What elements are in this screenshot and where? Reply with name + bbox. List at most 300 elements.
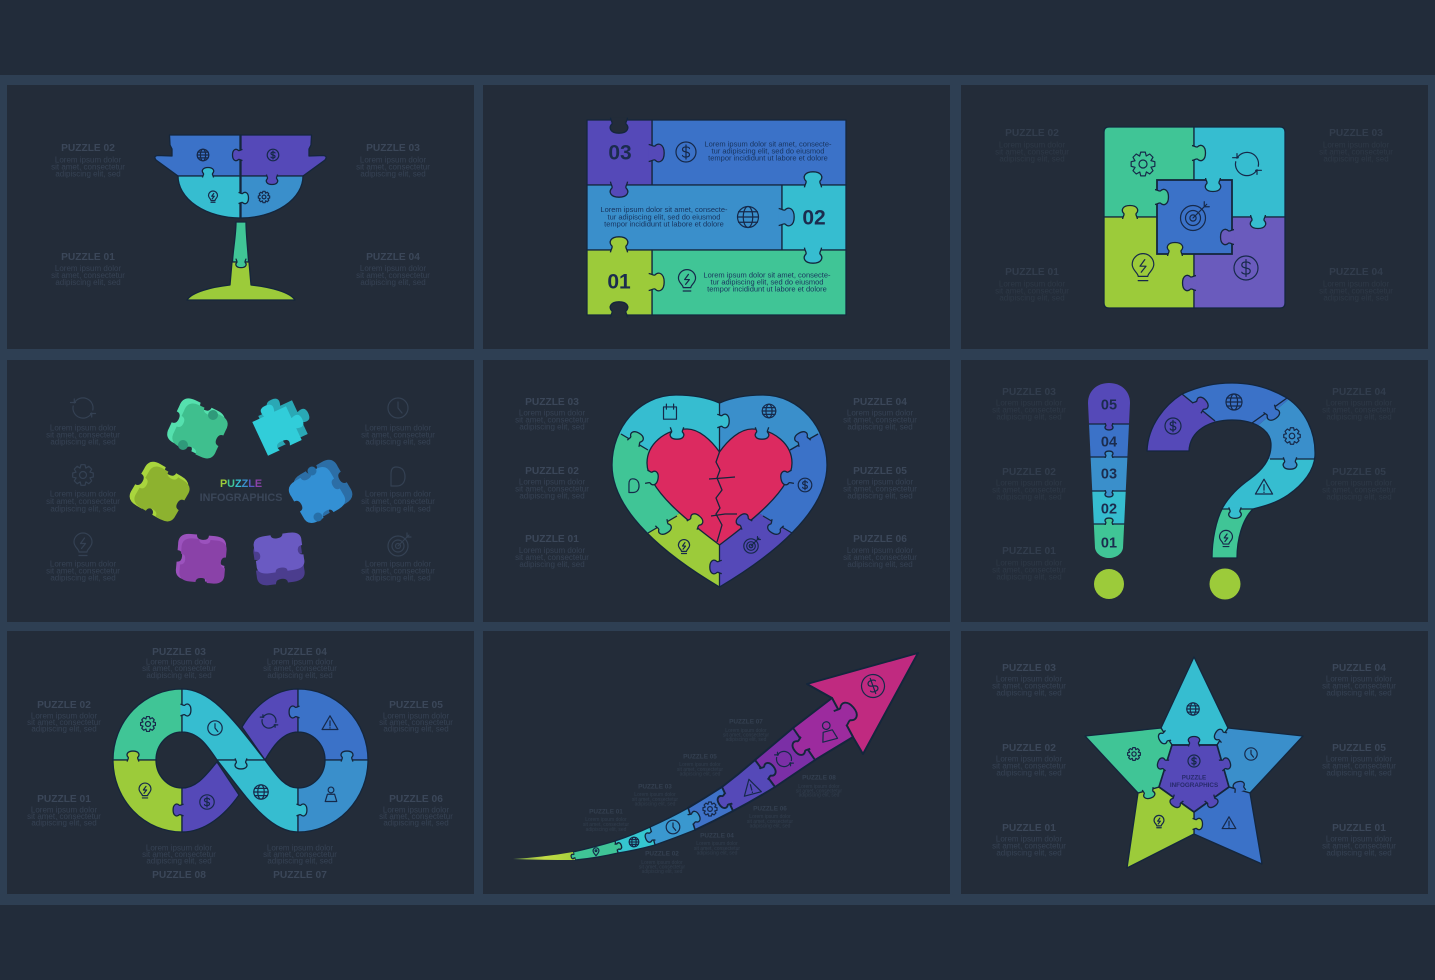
text row 1 — [704, 140, 832, 162]
piece: stem — [232, 222, 248, 262]
label: left middle: Lorem ipsum dolor — [50, 490, 116, 498]
label: puzzle 01: sit amet, consectetur — [995, 286, 1069, 296]
label: puzzle 02: sit amet, consectetur — [51, 162, 125, 172]
label: puzzle 06: adipiscing elit, sed — [750, 824, 791, 830]
label: puzzle 03: adipiscing elit, sed — [635, 802, 676, 808]
icon: gear — [703, 802, 717, 816]
icon: dollar — [1234, 256, 1258, 280]
label: puzzle 01: Lorem ipsum dolor — [996, 558, 1062, 568]
center title: PUZZLE — [220, 478, 262, 490]
piece: blue right top — [298, 689, 368, 760]
question mark — [1146, 382, 1316, 600]
label: puzzle 04: sit amet, consectetur — [843, 416, 917, 424]
label: puzzle 04: Lorem ipsum dolor — [267, 658, 333, 666]
center title — [1170, 774, 1218, 789]
arrow segment 6 — [722, 760, 775, 811]
label: puzzle 02: adipiscing elit, sed — [642, 869, 683, 875]
center title: INFOGRAPHICS — [200, 492, 282, 504]
label: puzzle 03: PUZZLE 03 — [1329, 128, 1383, 139]
label: right bottom: sit amet, consectetur — [361, 566, 435, 576]
label: puzzle 03: adipiscing elit, sed — [146, 671, 212, 680]
label: puzzle 01: PUZZLE 01 — [61, 252, 115, 263]
label: puzzle 02: Lorem ipsum dolor — [996, 478, 1062, 488]
label: puzzle 03: PUZZLE 03 — [525, 397, 579, 408]
label: puzzle 01 — [27, 794, 101, 828]
panel: arrow puzzle — [483, 631, 950, 894]
text row 3: tempor incididunt ut labore et dolore — [707, 284, 827, 294]
label: left top: Lorem ipsum dolor — [50, 424, 116, 432]
label: puzzle 01: adipiscing elit, sed — [999, 294, 1065, 302]
label: right top: adipiscing elit, sed — [365, 438, 431, 446]
icon: dollar — [267, 149, 279, 161]
piece: bottom left — [1104, 217, 1194, 308]
label: puzzle 03 — [992, 387, 1066, 422]
label: puzzle 03: sit amet, consectetur — [992, 682, 1066, 690]
label: left middle — [46, 490, 120, 514]
label: puzzle 02: adipiscing elit, sed — [55, 170, 121, 178]
label: puzzle 04: sit amet, consectetur — [1322, 682, 1396, 690]
label: puzzle 02 — [995, 128, 1069, 164]
label: puzzle 02 — [51, 143, 125, 178]
label: puzzle 06: PUZZLE 06 — [753, 806, 787, 812]
exclamation segments — [1088, 383, 1130, 558]
arrow labels — [583, 718, 842, 875]
label: puzzle 01: PUZZLE 01 — [589, 808, 623, 816]
question dot — [1210, 568, 1240, 600]
label: puzzle 03: Lorem ipsum dolor — [146, 658, 212, 666]
goblet tabs — [202, 149, 278, 268]
label: puzzle 08: adipiscing elit, sed — [146, 856, 212, 866]
row tabs — [610, 118, 822, 317]
label: puzzle 01: PUZZLE 01 — [1005, 267, 1059, 278]
icon: globe — [1226, 394, 1242, 410]
label: puzzle 01: adipiscing elit, sed — [996, 848, 1062, 858]
label: right bottom — [361, 560, 435, 582]
text row 2: tempor incididunt ut labore et dolore — [604, 220, 724, 228]
number 02: 02 — [1101, 502, 1117, 518]
icon: calendar — [664, 404, 676, 419]
icon: dollar — [200, 795, 214, 809]
label: puzzle 02: PUZZLE 02 — [525, 466, 579, 477]
label: puzzle 02: sit amet, consectetur — [995, 148, 1069, 156]
label: puzzle 04 — [1319, 267, 1393, 302]
label: puzzle 05: sit amet, consectetur — [1322, 762, 1396, 770]
label: puzzle 08 — [796, 774, 842, 798]
arrow head — [807, 653, 918, 754]
piece: green left top — [113, 689, 182, 760]
infinity chart — [113, 689, 368, 832]
label: puzzle 07: PUZZLE 07 — [273, 870, 327, 881]
label: puzzle 02 — [515, 466, 589, 500]
label: puzzle 06: Lorem ipsum dolor — [383, 806, 449, 814]
piece: right point — [1217, 728, 1303, 793]
label: puzzle 06: PUZZLE 06 — [853, 534, 907, 545]
label: puzzle 01 right: Lorem ipsum dolor — [1326, 834, 1392, 844]
icon: clock — [208, 721, 222, 735]
label: puzzle 03: sit amet, consectetur — [356, 162, 430, 172]
icon: pin — [593, 848, 599, 856]
icon: target — [744, 537, 760, 553]
label: puzzle 06: PUZZLE 06 — [389, 794, 443, 805]
heart crack — [709, 452, 737, 542]
icon: dollar — [798, 478, 812, 492]
label: puzzle 05: Lorem ipsum dolor — [679, 762, 721, 768]
label: puzzle 02: PUZZLE 02 — [645, 850, 679, 858]
label: puzzle 02: adipiscing elit, sed — [519, 492, 585, 500]
3D piece: blue — [285, 456, 356, 527]
label: puzzle 02: adipiscing elit, sed — [31, 724, 97, 734]
label: puzzle 05 — [677, 754, 723, 778]
panel: 3D puzzle pieces ring — [7, 360, 474, 622]
label: puzzle 05: sit amet, consectetur — [379, 718, 453, 727]
label: right bottom: adipiscing elit, sed — [365, 574, 431, 582]
center title: PUZZLE — [1182, 774, 1206, 782]
label: puzzle 03: adipiscing elit, sed — [519, 422, 585, 432]
number 01: 01 — [607, 270, 631, 294]
label: puzzle 05: sit amet, consectetur — [1322, 486, 1396, 494]
label: puzzle 01: Lorem ipsum dolor — [55, 264, 121, 273]
label: puzzle 03 — [515, 397, 589, 432]
label: puzzle 01 — [992, 546, 1066, 582]
number 05: 05 — [1101, 398, 1117, 414]
label: puzzle 05 — [843, 466, 917, 500]
label: puzzle 03: Lorem ipsum dolor — [1323, 140, 1389, 150]
panel: star puzzle — [961, 631, 1428, 894]
label: puzzle 04: PUZZLE 04 — [1332, 663, 1386, 674]
icon: warning — [740, 777, 761, 796]
piece: bowl right — [241, 176, 303, 218]
exclamation dot — [1094, 569, 1124, 599]
icon: globe — [762, 404, 776, 418]
label: puzzle 04 — [694, 832, 740, 856]
label: puzzle 04: PUZZLE 04 — [700, 832, 734, 840]
label: puzzle 02: adipiscing elit, sed — [999, 154, 1065, 164]
label: right bottom: Lorem ipsum dolor — [365, 560, 431, 568]
label: puzzle 03: adipiscing elit, sed — [360, 170, 426, 178]
piece: indigo lower — [182, 762, 239, 832]
label: puzzle 01 right: sit amet, consectetur — [1322, 842, 1396, 850]
piece: top point — [1161, 657, 1228, 745]
icon: gear — [1128, 748, 1140, 760]
red inner heart — [647, 429, 792, 545]
text row 1: tur adipiscing elit, sed do eiusmod — [712, 146, 824, 156]
piece: goblet top right — [241, 135, 326, 176]
square puzzle chart — [1104, 127, 1285, 308]
icon: bulb dim — [74, 533, 92, 556]
label: puzzle 02: PUZZLE 02 — [1002, 743, 1056, 754]
heart outer ring pieces — [612, 396, 826, 586]
label: puzzle 03: Lorem ipsum dolor — [996, 398, 1062, 408]
label: puzzle 03: sit amet, consectetur — [632, 797, 678, 803]
label: puzzle 04: adipiscing elit, sed — [1326, 688, 1392, 698]
label: puzzle 02: Lorem ipsum dolor — [519, 478, 585, 486]
arrow tabs — [571, 700, 860, 859]
label: puzzle 05: PUZZLE 05 — [1332, 743, 1386, 754]
piece: bottom right — [1194, 217, 1285, 308]
icon: cycle dim — [70, 398, 96, 418]
label: puzzle 03: Lorem ipsum dolor — [634, 792, 676, 798]
label: puzzle 01: sit amet, consectetur — [515, 553, 589, 562]
label: puzzle 01: Lorem ipsum dolor — [996, 834, 1062, 844]
number 01: 01 — [1101, 536, 1117, 552]
icon: cycle — [1233, 152, 1261, 176]
piece: base — [187, 262, 295, 300]
exclamation mark — [1088, 383, 1130, 599]
3D piece: green — [164, 395, 231, 462]
panel: exclamation and question marks — [961, 360, 1428, 622]
label: puzzle 04: sit amet, consectetur — [694, 846, 740, 852]
label: puzzle 03: PUZZLE 03 — [1002, 387, 1056, 398]
icon: warning — [1222, 817, 1236, 829]
label: puzzle 05: sit amet, consectetur — [843, 484, 917, 494]
label: puzzle 05: adipiscing elit, sed — [680, 772, 721, 778]
label: puzzle 05: Lorem ipsum dolor — [1326, 478, 1392, 488]
icon: clock dim — [388, 398, 408, 418]
exclamation seams — [1089, 424, 1129, 524]
icon: bulb — [678, 270, 696, 291]
label: right middle — [361, 490, 435, 514]
label: puzzle 03: sit amet, consectetur — [142, 664, 216, 673]
label: puzzle 01: PUZZLE 01 — [1002, 546, 1056, 557]
label: puzzle 04: adipiscing elit, sed — [847, 422, 913, 432]
piece: lime left bottom — [113, 760, 182, 832]
label: puzzle 04: sit amet, consectetur — [1322, 406, 1396, 414]
label: puzzle 03: adipiscing elit, sed — [996, 412, 1062, 422]
piece: lower right point — [1194, 787, 1262, 864]
label: puzzle 02: sit amet, consectetur — [27, 718, 101, 727]
icon: gear — [258, 191, 270, 203]
number 02: 02 — [802, 206, 826, 230]
label: puzzle 01: PUZZLE 01 — [525, 534, 579, 545]
3D piece: lime — [126, 458, 193, 525]
icon: globe — [254, 785, 268, 799]
icon: target dim — [388, 533, 411, 556]
icon: gear — [141, 717, 155, 731]
icon: bulb — [139, 783, 151, 798]
label: puzzle 03: PUZZLE 03 — [1002, 663, 1056, 674]
piece: goblet top left — [155, 135, 240, 176]
label: puzzle 04: PUZZLE 04 — [273, 647, 327, 658]
label: puzzle 01: adipiscing elit, sed — [996, 572, 1062, 582]
label: puzzle 05 — [1322, 743, 1396, 778]
label: puzzle 06: adipiscing elit, sed — [847, 560, 913, 569]
exclamation tabs — [1105, 423, 1113, 525]
label: puzzle 04: sit amet, consectetur — [356, 271, 430, 280]
icon: dollar — [858, 671, 888, 701]
goblet chart — [155, 135, 326, 300]
panel: heart puzzle — [483, 360, 950, 622]
label: puzzle 03: sit amet, consectetur — [992, 406, 1066, 414]
text row 3: tur adipiscing elit, sed do eiusmod — [711, 278, 823, 286]
label: puzzle 04: adipiscing elit, sed — [697, 850, 738, 856]
label: puzzle 05 — [379, 700, 453, 734]
label: left middle: sit amet, consectetur — [46, 497, 120, 506]
label: puzzle 05: adipiscing elit, sed — [1326, 492, 1392, 502]
icon: cycle — [260, 714, 278, 728]
label: puzzle 04: sit amet, consectetur — [263, 664, 337, 673]
label: puzzle 01: Lorem ipsum dolor — [999, 280, 1065, 288]
icon: bulb — [1132, 254, 1154, 281]
label: puzzle 08: PUZZLE 08 — [152, 870, 206, 881]
label: puzzle 02: Lorem ipsum dolor — [31, 712, 97, 720]
piece: bowl left — [178, 176, 240, 218]
label: puzzle 02 — [992, 743, 1066, 778]
label: puzzle 06: sit amet, consectetur — [379, 812, 453, 821]
text row 1: tempor incididunt ut labore et dolore — [708, 154, 828, 162]
label: puzzle 01: Lorem ipsum dolor — [585, 817, 627, 823]
label: puzzle 03: PUZZLE 03 — [366, 143, 420, 154]
icon: person — [325, 787, 337, 801]
label: puzzle 01: sit amet, consectetur — [992, 842, 1066, 850]
label: puzzle 05: adipiscing elit, sed — [1326, 768, 1392, 778]
label: puzzle 02: Lorem ipsum dolor — [996, 754, 1062, 764]
label: puzzle 01: Lorem ipsum dolor — [31, 806, 97, 814]
label: left middle: adipiscing elit, sed — [50, 504, 116, 514]
label: puzzle 08: Lorem ipsum dolor — [146, 844, 212, 852]
label: puzzle 02: sit amet, consectetur — [992, 486, 1066, 494]
label: left top: sit amet, consectetur — [46, 430, 120, 440]
label: puzzle 06 — [379, 794, 453, 828]
number 03: 03 — [608, 142, 632, 164]
label: puzzle 07: adipiscing elit, sed — [267, 856, 333, 866]
label: puzzle 06 — [843, 534, 917, 569]
panel: rectangle puzzle rows — [483, 85, 950, 349]
icon: dollar — [1165, 418, 1181, 434]
label: puzzle 03: sit amet, consectetur — [1319, 148, 1393, 156]
center title: INFOGRAPHICS — [1170, 782, 1218, 789]
label: puzzle 04 — [843, 397, 917, 432]
heart chart — [612, 394, 828, 588]
label: puzzle 02: PUZZLE 02 — [1002, 467, 1056, 478]
icon: bulb — [1220, 530, 1232, 547]
label: puzzle 01: adipiscing elit, sed — [586, 827, 627, 833]
arrow segment 7 — [755, 728, 815, 787]
label: puzzle 01: sit amet, consectetur — [51, 271, 125, 280]
arrow segment 4 — [650, 808, 695, 845]
label: puzzle 05: Lorem ipsum dolor — [1326, 754, 1392, 764]
label: right middle: sit amet, consectetur — [361, 497, 435, 506]
label: puzzle 01: adipiscing elit, sed — [31, 818, 97, 828]
label: puzzle 03: Lorem ipsum dolor — [360, 156, 426, 164]
label: puzzle 04: adipiscing elit, sed — [1323, 294, 1389, 302]
label: puzzle 01: PUZZLE 01 — [37, 794, 91, 805]
text row 3: Lorem ipsum dolor sit amet, consecte- — [703, 270, 831, 280]
label: puzzle 04: adipiscing elit, sed — [267, 671, 333, 680]
label: puzzle 08: adipiscing elit, sed — [799, 792, 840, 798]
question outline — [1147, 383, 1315, 558]
piece: top left — [1104, 127, 1194, 217]
label: puzzle 05: adipiscing elit, sed — [383, 724, 449, 734]
label: puzzle 07: Lorem ipsum dolor — [267, 844, 333, 852]
panel: infinity puzzle — [7, 631, 474, 894]
label: puzzle 03: adipiscing elit, sed — [1323, 154, 1389, 164]
label: puzzle 01 right: PUZZLE 01 — [1332, 823, 1386, 834]
piece: row 1 bar — [652, 120, 846, 185]
heart outer outline — [612, 395, 827, 587]
label: puzzle 06: Lorem ipsum dolor — [847, 546, 913, 555]
icon: globe — [1187, 703, 1199, 715]
label: puzzle 04: Lorem ipsum dolor — [847, 408, 913, 418]
label: puzzle 04: Lorem ipsum dolor — [1326, 398, 1392, 408]
label: left bottom: sit amet, consectetur — [46, 566, 120, 576]
label: puzzle 03 — [632, 784, 678, 808]
icon: bulb — [208, 191, 218, 202]
label: left bottom: Lorem ipsum dolor — [50, 560, 116, 568]
text row 3 — [703, 270, 831, 294]
label: puzzle 01 — [992, 823, 1066, 858]
label: puzzle 02: PUZZLE 02 — [61, 143, 115, 154]
label: puzzle 06 — [747, 806, 793, 830]
label: puzzle 03: Lorem ipsum dolor — [519, 408, 585, 418]
arrow segment 3 — [615, 827, 655, 853]
label: puzzle 04: PUZZLE 04 — [1332, 387, 1386, 398]
label: puzzle 02 — [992, 467, 1066, 502]
label: puzzle 04: adipiscing elit, sed — [1326, 412, 1392, 422]
piece: 01 — [587, 250, 652, 315]
label: puzzle 03: sit amet, consectetur — [515, 416, 589, 424]
arrow segment 2 — [573, 841, 618, 860]
icon: gear dim — [73, 465, 93, 485]
piece: center pentagon — [1159, 745, 1229, 812]
label: puzzle 03 — [142, 647, 216, 680]
infinity tabs — [127, 704, 353, 816]
panel: goblet puzzle — [7, 85, 474, 349]
arrow shaft segment 8 — [793, 698, 853, 760]
label: right top: sit amet, consectetur — [361, 430, 435, 440]
label: puzzle 01 right: adipiscing elit, sed — [1326, 848, 1392, 858]
label: puzzle 02: PUZZLE 02 — [37, 700, 91, 711]
arrow segment 5 — [688, 787, 733, 830]
label: left bottom: adipiscing elit, sed — [50, 574, 116, 582]
label: puzzle 01 — [515, 534, 589, 569]
question tabs — [1192, 395, 1297, 518]
piece: cyan upper band — [182, 689, 265, 760]
icon: bulb — [678, 540, 690, 554]
label: puzzle 05 — [1322, 467, 1396, 502]
icon: warning — [322, 716, 338, 729]
question segments — [1148, 384, 1314, 558]
icon: cycle — [775, 751, 793, 767]
label: puzzle 08: sit amet, consectetur — [796, 788, 842, 794]
label: puzzle 02: sit amet, consectetur — [992, 762, 1066, 770]
icon: globe — [629, 837, 639, 847]
piece: cyan lower band — [217, 760, 298, 832]
label: right middle: adipiscing elit, sed — [365, 504, 431, 514]
label: puzzle 01 — [51, 252, 125, 287]
label: puzzle 03: PUZZLE 03 — [638, 784, 672, 790]
label: puzzle 04: Lorem ipsum dolor — [1323, 280, 1389, 288]
label: puzzle 06: adipiscing elit, sed — [383, 818, 449, 828]
label: puzzle 03: PUZZLE 03 — [152, 647, 206, 658]
label: puzzle 02: Lorem ipsum dolor — [999, 140, 1065, 150]
icon: bulb — [1154, 815, 1164, 828]
label: puzzle 05: PUZZLE 05 — [683, 754, 717, 760]
square tabs — [1122, 145, 1266, 291]
label: puzzle 07 — [263, 844, 337, 881]
label: puzzle 07: adipiscing elit, sed — [726, 737, 767, 743]
label: left bottom — [46, 560, 120, 582]
label: puzzle 05: adipiscing elit, sed — [847, 492, 913, 500]
icon: person — [818, 720, 838, 742]
arrow chart — [513, 653, 918, 860]
text row 2: tur adipiscing elit, sed do eiusmod — [608, 212, 720, 222]
question seams — [1182, 394, 1314, 509]
piece: 03 — [587, 120, 652, 185]
label: puzzle 02: adipiscing elit, sed — [996, 492, 1062, 502]
label: puzzle 05: Lorem ipsum dolor — [383, 712, 449, 720]
label: puzzle 08: PUZZLE 08 — [802, 774, 836, 782]
label: puzzle 07 — [723, 718, 769, 743]
